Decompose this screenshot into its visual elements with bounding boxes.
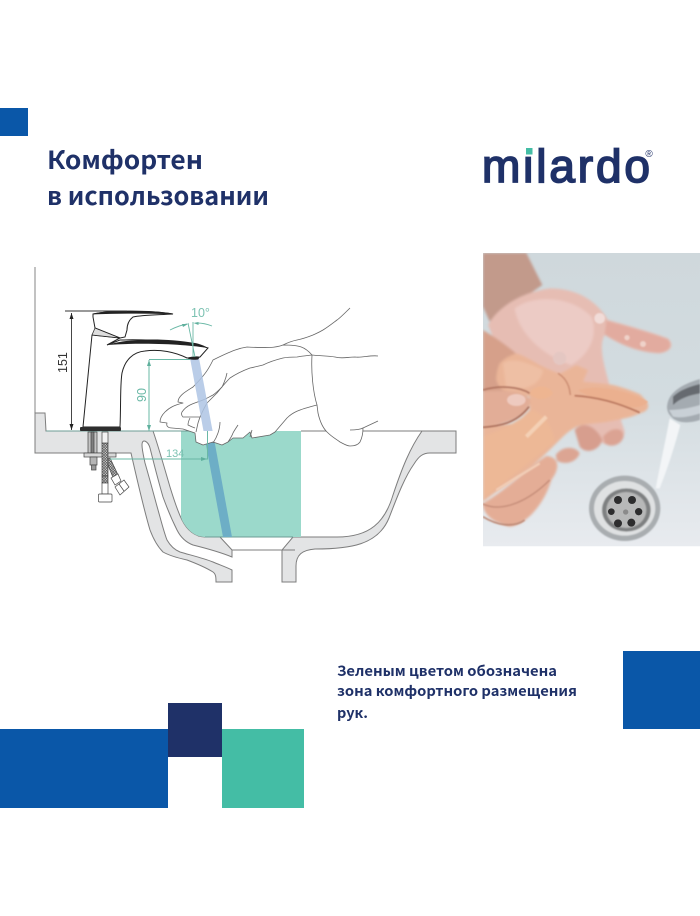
caption text: Зеленым цветом обозначена — [337, 661, 557, 681]
drain holes — [608, 496, 642, 527]
dimension: 134 — [110, 431, 208, 461]
basin section — [35, 413, 456, 582]
logo: milardo: milardo — [482, 140, 650, 192]
dimension: 10 degrees — [170, 306, 212, 357]
title: Комфортен — [47, 141, 203, 177]
dimension: 90 — [135, 360, 190, 431]
nail, folds and creases — [507, 394, 526, 406]
diagram: faucet over washbasin — [35, 267, 456, 582]
photo: hands under running water — [483, 253, 700, 546]
caption text: зона комфортного размещения — [337, 681, 577, 701]
plumbing: shank and hoses — [84, 432, 129, 502]
child's hand — [483, 353, 648, 502]
water stream lower part — [204, 431, 232, 537]
dimension: 151: 151 — [56, 352, 70, 373]
caption text — [337, 661, 577, 723]
soapy palm — [488, 288, 671, 445]
drain — [589, 476, 660, 541]
wall line — [34, 267, 36, 413]
faucet — [667, 379, 700, 422]
fingers below — [575, 425, 602, 451]
lower adult hand — [483, 456, 557, 527]
dimension: 151 — [56, 311, 127, 430]
title: в использовании — [47, 177, 269, 213]
water stream upper part — [190, 358, 213, 431]
logo: milardo: ® — [645, 149, 653, 160]
title — [47, 141, 269, 213]
water stream — [656, 418, 680, 488]
decorative square: top left — [0, 108, 28, 136]
decorative square: right blue — [623, 651, 700, 729]
adult left hand — [483, 330, 516, 393]
dimension: 90: 90 — [135, 388, 149, 402]
green comfort zone — [181, 431, 301, 537]
faucet — [80, 311, 208, 431]
hands fill — [160, 345, 378, 446]
dimension: 134: 134 — [166, 448, 184, 460]
caption text: рук. — [337, 703, 368, 723]
upper forearm — [483, 253, 542, 322]
soap bubbles — [594, 313, 605, 324]
adult thumb — [483, 391, 530, 427]
dimension: 10 degrees: 10° — [191, 306, 210, 320]
hand outlines — [160, 308, 378, 446]
decorative blocks: bottom left — [0, 703, 304, 808]
